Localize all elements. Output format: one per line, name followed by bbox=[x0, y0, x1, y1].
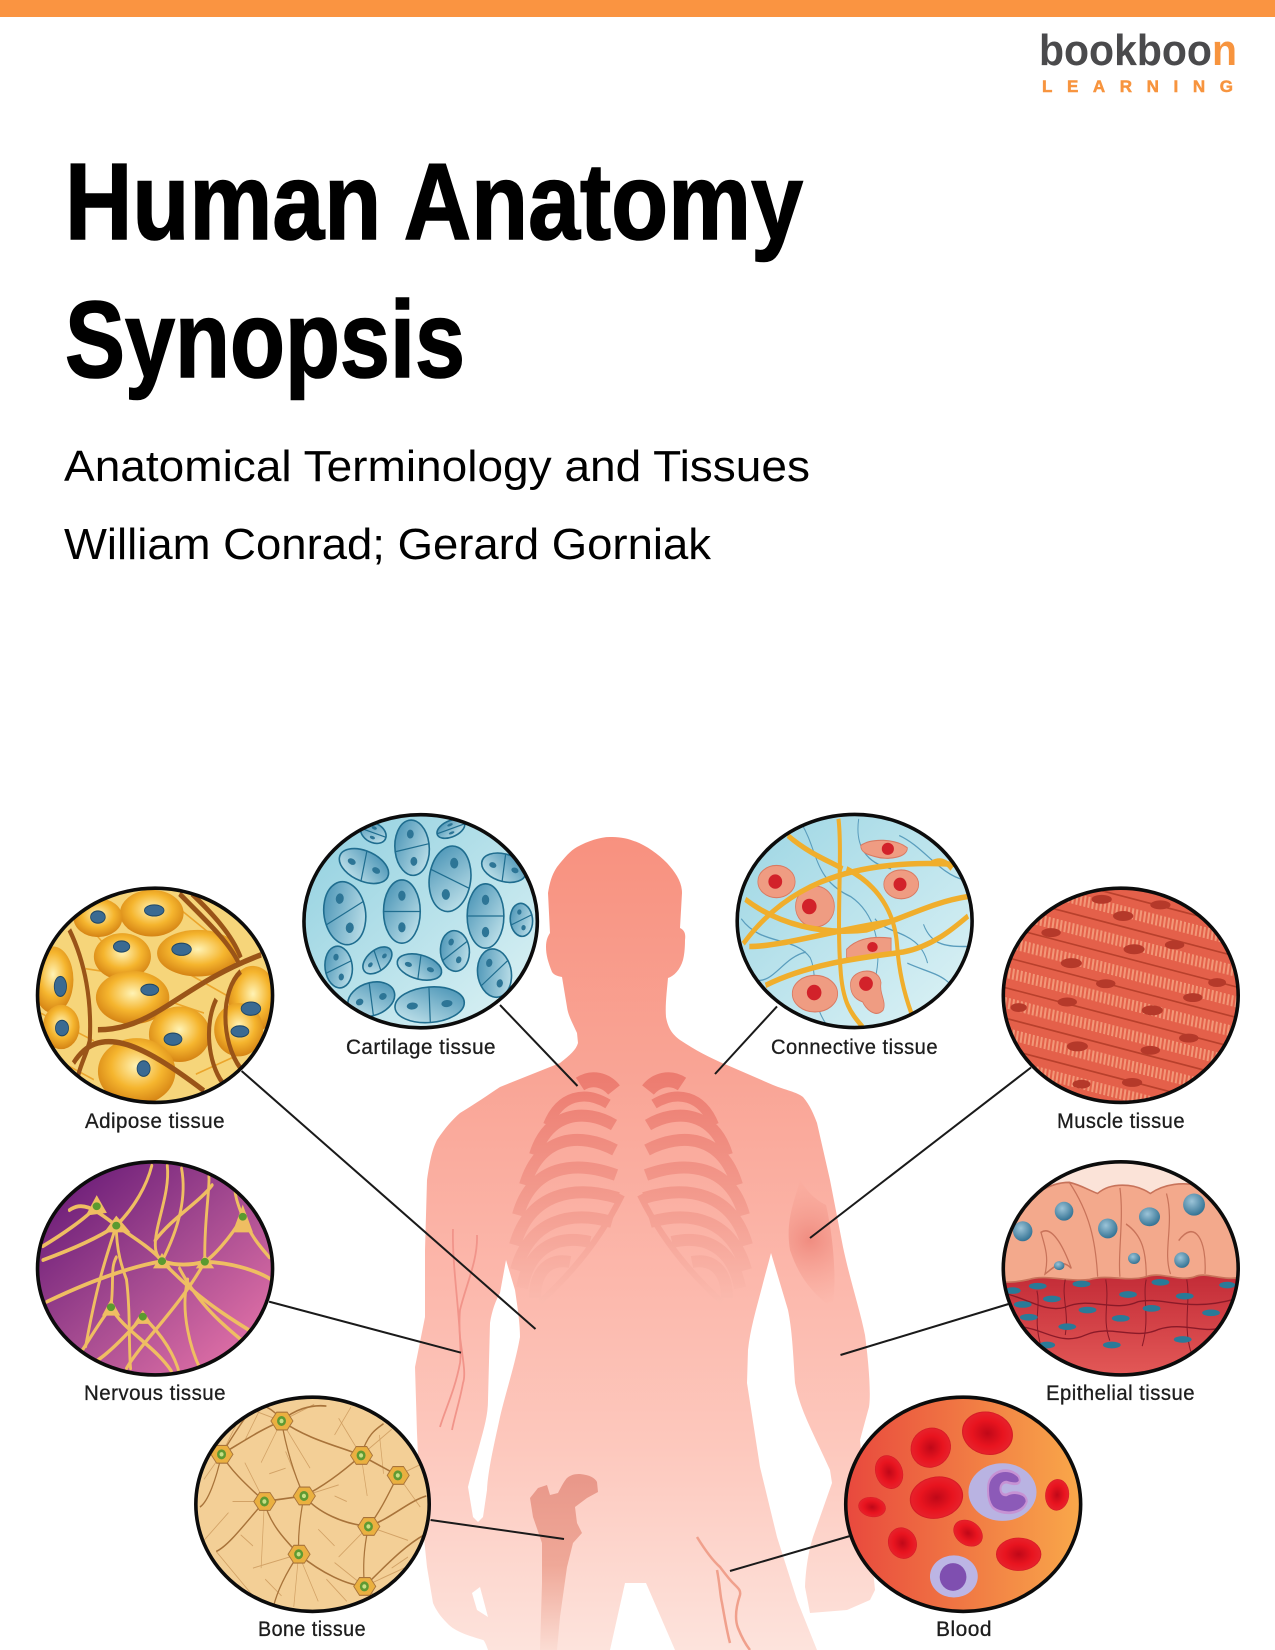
connective circle bbox=[735, 812, 974, 1031]
title: Synopsis bbox=[65, 279, 465, 401]
leader line: muscle bbox=[810, 1068, 1031, 1238]
panel: connective tissue bbox=[715, 812, 974, 1074]
title: Human Anatomy bbox=[65, 141, 803, 263]
blood circle bbox=[842, 1393, 1086, 1615]
epithelial circle bbox=[1000, 1160, 1243, 1379]
leader line: nervous bbox=[269, 1302, 461, 1353]
label: blood: Blood bbox=[936, 1618, 992, 1641]
panel: cartilage tissue bbox=[302, 813, 578, 1086]
arm nerves bbox=[440, 1229, 477, 1430]
panel: nervous tissue bbox=[37, 1160, 461, 1405]
panel: epithelial tissue bbox=[840, 1160, 1243, 1405]
panel: muscle tissue bbox=[809, 886, 1240, 1239]
muscle circle bbox=[1002, 886, 1240, 1104]
cartilage circle bbox=[302, 813, 539, 1030]
femur bone bbox=[530, 1474, 598, 1650]
leader line: adipose bbox=[242, 1071, 536, 1329]
label: adipose tissue: Adipose tissue bbox=[85, 1110, 225, 1133]
title bbox=[65, 141, 803, 401]
rib cage bbox=[515, 1080, 747, 1302]
panel: adipose tissue bbox=[33, 885, 535, 1329]
panel: bone tissue bbox=[194, 1395, 564, 1641]
human body silhouette bbox=[415, 837, 875, 1650]
subtitle: Anatomical Terminology and Tissues bbox=[64, 442, 810, 491]
white gap between left arm and torso bbox=[468, 1260, 520, 1522]
leader line: epithelial bbox=[840, 1304, 1009, 1355]
label: connective tissue: Connective tissue bbox=[771, 1036, 938, 1059]
label: nervous tissue: Nervous tissue bbox=[84, 1382, 226, 1405]
top orange bar bbox=[0, 0, 1275, 17]
nervous circle bbox=[37, 1160, 273, 1377]
label: bone tissue: Bone tissue bbox=[258, 1618, 366, 1641]
leader line: connective bbox=[715, 1006, 777, 1074]
logo: bookboon learning: bookboon bbox=[1039, 26, 1237, 75]
label: cartilage tissue: Cartilage tissue bbox=[346, 1036, 496, 1059]
thigh vein bbox=[697, 1537, 750, 1650]
logo: bookboon learning bbox=[1039, 26, 1237, 96]
leader line: bone bbox=[431, 1520, 564, 1539]
arm muscle highlight bbox=[789, 1180, 834, 1308]
leader line: blood bbox=[730, 1536, 850, 1571]
label: muscle tissue: Muscle tissue bbox=[1057, 1110, 1185, 1133]
bone circle bbox=[194, 1395, 430, 1614]
label: epithelial tissue: Epithelial tissue bbox=[1046, 1382, 1195, 1405]
adipose circle bbox=[33, 885, 277, 1105]
logo: bookboon learning: LEARNING bbox=[1042, 77, 1233, 96]
white notch by left hand bbox=[472, 1587, 488, 1617]
leader line: cartilage bbox=[500, 1005, 578, 1086]
panel: blood bbox=[730, 1393, 1086, 1641]
authors: William Conrad; Gerard Gorniak bbox=[64, 520, 712, 569]
